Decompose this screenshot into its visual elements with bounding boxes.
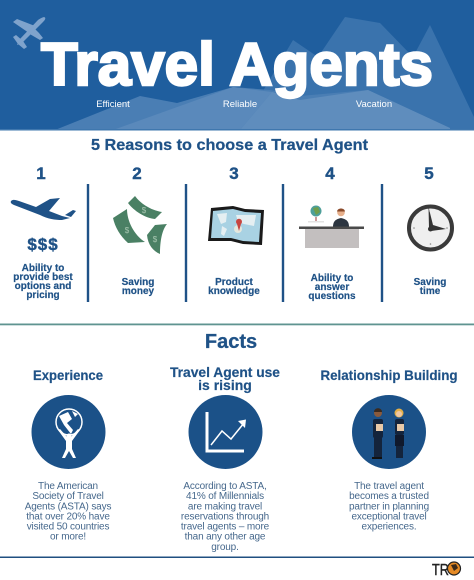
- icon: flying banknotes: [113, 196, 167, 254]
- icon: rising line chart: [188, 395, 262, 469]
- reason 2: saving money: [113, 164, 167, 297]
- icon: clock: [409, 206, 452, 250]
- text: experience body: Society of Travel: [32, 491, 104, 502]
- icon: airplane: [11, 198, 76, 220]
- fact: experience: [25, 367, 111, 542]
- text: relationship body: becomes a trusted: [349, 491, 429, 502]
- text: relationship body: exceptional travel: [351, 512, 427, 522]
- text: rising body: According to ASTA,: [183, 481, 267, 492]
- icon: two travel agents: [352, 395, 426, 469]
- text: ability to provide: pricing: [26, 290, 60, 301]
- text: relationship body: experiences.: [362, 522, 416, 532]
- reason 3: product knowledge: [208, 164, 264, 297]
- fact: use is rising: is rising: [198, 377, 252, 393]
- tagline: Efficient: Efficient: [96, 99, 130, 110]
- icon: header airplane: [13, 17, 45, 49]
- text: ability to answer: questions: [308, 291, 356, 302]
- heading: facts: Facts: [205, 331, 257, 353]
- icon: flying banknotes: $: [153, 235, 158, 244]
- text: rising body: 41% of Millennials: [186, 491, 264, 502]
- reason 2: saving money: 2: [132, 164, 142, 183]
- reason 5: saving time: [409, 164, 452, 297]
- tagline: Reliable: Reliable: [223, 99, 257, 110]
- text: rising body: are making travel: [188, 502, 262, 512]
- text: relationship body: The travel agent: [354, 481, 424, 492]
- fact: experience: Experience: [33, 367, 103, 383]
- text: experience body: visited 50 countries: [27, 522, 109, 532]
- icon: map: [208, 206, 264, 245]
- fact: relationship building: [320, 367, 458, 532]
- text: ability to provide: options and: [15, 281, 71, 292]
- reason 3: product knowledge: 3: [229, 164, 239, 183]
- fact: relationship building: Relationship Building: [320, 367, 458, 383]
- icon: flying banknotes: $: [142, 206, 147, 215]
- text: relationship body: partner in planning: [349, 502, 429, 512]
- title: Travel Agents: [41, 31, 433, 98]
- text: product knowledge: knowledge: [208, 286, 260, 297]
- text: experience body: that over 20% have: [26, 512, 110, 522]
- heading: 5 reasons: 5 Reasons to choose a Travel Agent: [91, 137, 369, 154]
- logo: TRO: TR: [432, 562, 449, 579]
- reason 1: best pricing: 1: [36, 164, 46, 183]
- fact: use is rising: Travel Agent use: [170, 364, 280, 380]
- reason 5: saving time: 5: [424, 164, 434, 183]
- reason 4: answer questions: 4: [325, 164, 335, 183]
- text: experience body: Agents (ASTA) says: [25, 502, 111, 512]
- tagline: Vacation: Vacation: [356, 99, 392, 110]
- text: $$$: $$$: [27, 235, 59, 254]
- text: saving time: Saving: [414, 277, 446, 288]
- text: ability to answer: Ability to: [311, 273, 353, 284]
- text: product knowledge: Product: [215, 277, 254, 288]
- text: experience body: or more!: [50, 532, 86, 542]
- text: saving money: money: [122, 286, 155, 297]
- text: ability to provide: Ability to: [22, 263, 64, 274]
- icon: flying banknotes: $: [125, 226, 130, 235]
- icon: agent at desk: [299, 206, 364, 248]
- text: rising body: travel agents – more: [181, 522, 270, 532]
- header banner: [0, 0, 474, 130]
- text: ability to provide: provide best: [13, 272, 73, 283]
- reason 1: best pricing: [11, 164, 76, 301]
- text: saving time: time: [420, 286, 441, 297]
- text: saving money: Saving: [122, 277, 154, 288]
- icon: atlas holding globe: [32, 395, 106, 469]
- text: experience body: The American: [38, 481, 98, 492]
- text: ability to answer: answer: [315, 282, 349, 293]
- fact: use is rising: [170, 364, 280, 553]
- text: rising body: than any other age: [185, 532, 266, 542]
- text: rising body: group.: [211, 542, 239, 553]
- reason 4: answer questions: [299, 164, 364, 302]
- text: rising body: reservations through: [181, 512, 269, 522]
